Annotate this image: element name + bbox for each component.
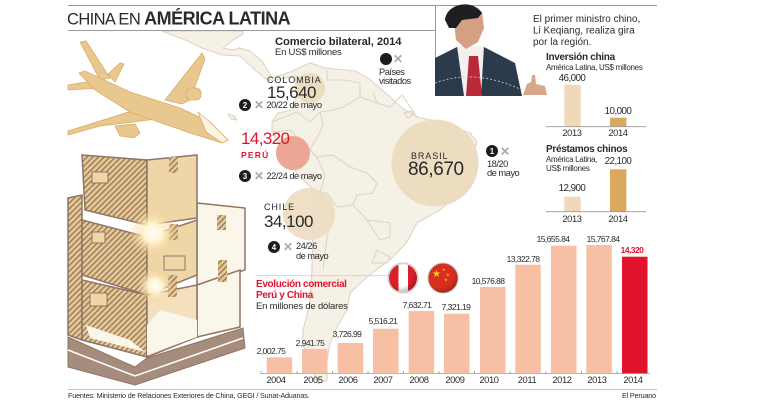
illustration: stacked boxes on pallet <box>68 155 245 385</box>
chart: Préstamos chinos <box>546 144 646 224</box>
photo: Li Keqiang <box>435 4 547 96</box>
chart: Préstamos chinos: 22,100 <box>605 156 632 167</box>
label: Brazil: 86,670 <box>408 159 464 180</box>
heading: evolución comercial: Evolución comercial <box>256 279 347 290</box>
icon: China flag: ★ <box>432 269 441 280</box>
heading: evolución comercial <box>256 276 390 312</box>
chart: Perú-China trade by year: 2004 <box>266 375 286 385</box>
chart: Perú-China trade by year: 2010 <box>479 375 499 385</box>
heading: evolución comercial: Perú y China <box>256 290 314 301</box>
label: Brazil: BRASIL <box>411 151 448 161</box>
chart: Perú-China trade by year: 14,320 <box>621 245 644 255</box>
text: prime minister caption: El primer ministro chino, <box>533 14 640 25</box>
visit 4: 4 <box>272 243 277 252</box>
label: Peru <box>241 129 290 160</box>
heading: evolución comercial: En millones de dólares <box>256 301 348 312</box>
label: Chile: CHILE <box>264 202 295 212</box>
chart: Préstamos chinos: América Latina, <box>546 155 597 164</box>
chart: Perú-China trade by year: 15,767.84 <box>587 234 620 244</box>
chart: Inversión china: 2014 <box>608 128 628 138</box>
chart: Inversión china: 10,000 <box>605 106 632 117</box>
chart: Perú-China trade by year: 7,632.71 <box>403 300 432 310</box>
chart: Perú-China trade by year: 2014 <box>623 375 643 385</box>
label: Chile <box>264 202 313 231</box>
label: Chile: 34,100 <box>264 212 313 231</box>
chart: Perú-China trade by year: 2006 <box>338 375 358 385</box>
chart: Perú-China trade by year: 10,576.88 <box>472 276 505 286</box>
text: prime minister caption: Li Keqiang, realiza gira <box>533 26 635 36</box>
legend: countries visited: Países <box>379 67 405 77</box>
label: Peru: PERÚ <box>241 149 269 160</box>
visit 4: 24/26 <box>296 241 317 251</box>
chart: Préstamos chinos: 12,900 <box>559 183 586 194</box>
chart: Inversión china: 46,000 <box>559 73 586 84</box>
visit 2: 2 <box>243 101 248 110</box>
chart: Perú-China trade by year: 7,321.19 <box>442 302 471 312</box>
visit 1 <box>486 144 519 178</box>
circle: Peru <box>276 136 310 170</box>
label: Colombia <box>267 75 322 102</box>
chart: Perú-China trade by year: 2,002.75 <box>257 346 286 356</box>
label: Peru: 14,320 <box>241 129 290 148</box>
visit 1: de mayo <box>487 168 519 178</box>
visit 3 <box>239 169 322 183</box>
illustration: airplane <box>68 41 228 143</box>
chart: Perú-China trade by year: 2007 <box>373 375 393 385</box>
visit 2: 20/22 de mayo <box>266 100 322 110</box>
visit 4 <box>268 240 328 261</box>
chart: Perú-China trade by year: 3,726.99 <box>333 329 362 339</box>
chart: Préstamos chinos: 2013 <box>562 214 582 224</box>
visit 1: 18/20 <box>487 159 508 169</box>
heading: comercio bilateral <box>275 36 402 58</box>
legend: countries visited <box>379 52 412 86</box>
visit 1: 1 <box>490 147 495 156</box>
chart: Inversión china <box>546 52 646 138</box>
icon: China flag <box>428 263 458 293</box>
visit 3: 22/24 de mayo <box>266 171 322 181</box>
visit 2: ✕ <box>254 98 264 112</box>
legend: countries visited: visitados <box>379 76 412 86</box>
icon: China flag: ★ <box>444 277 448 282</box>
chart: Inversión china: 2013 <box>562 128 582 138</box>
chart: Perú-China trade by year <box>257 234 650 385</box>
visit 1: ✕ <box>500 144 510 158</box>
icon: China flag: ★ <box>442 267 446 272</box>
chart: Perú-China trade by year: 2005 <box>303 375 323 385</box>
label: Colombia: 15,640 <box>267 83 316 102</box>
visit 3: 3 <box>243 172 248 181</box>
chart: Perú-China trade by year: 13,322.78 <box>507 254 540 264</box>
visit 4: de mayo <box>296 251 328 261</box>
footer: sources <box>68 390 657 400</box>
chart: Inversión china: América Latina, US$ millones <box>546 63 643 72</box>
chart: Perú-China trade by year: 2012 <box>552 375 572 385</box>
chart: Perú-China trade by year: 2,941.75 <box>296 338 325 348</box>
chart: Perú-China trade by year: 2008 <box>409 375 429 385</box>
footer: sources: Fuentes: Ministerio de Relaciones Exteriores de China, GEGI / Sunat-Aduanas. <box>68 391 310 400</box>
icon: Peru flag <box>388 263 418 293</box>
chart: Perú-China trade by year: 5,516.21 <box>369 316 398 326</box>
heading: comercio bilateral: En US$ millones <box>275 47 342 58</box>
legend: countries visited: ✕ <box>393 52 403 66</box>
visit 4: ✕ <box>283 240 293 254</box>
heading: comercio bilateral: Comercio bilateral, 2014 <box>275 36 402 48</box>
chart: Inversión china: Inversión china <box>546 52 616 63</box>
map: South America <box>162 31 477 384</box>
circle: Brazil <box>392 120 478 206</box>
text: prime minister caption: por la región. <box>533 37 591 48</box>
chart: Préstamos chinos: US$ millones <box>546 164 590 173</box>
visit 3: ✕ <box>254 169 264 183</box>
chart: Perú-China trade by year: 2009 <box>445 375 465 385</box>
title: CHINA EN AMÉRICA LATINA <box>67 8 291 28</box>
chart: Perú-China trade by year: 2011 <box>518 375 536 385</box>
footer: sources: El Peruano <box>622 391 656 400</box>
label: Colombia: COLOMBIA <box>267 75 322 85</box>
chart: Préstamos chinos: 2014 <box>608 214 628 224</box>
icon: China flag: ★ <box>446 272 450 277</box>
visit 2 <box>239 98 322 112</box>
chart: Perú-China trade by year: 15,655.84 <box>537 234 570 244</box>
circle: Chile <box>283 188 335 240</box>
chart: Perú-China trade by year: 2013 <box>587 375 607 385</box>
title rules <box>68 5 657 96</box>
chart: Préstamos chinos: Préstamos chinos <box>546 144 628 155</box>
text: prime minister caption <box>533 14 640 48</box>
circle: Colombia <box>295 73 325 103</box>
